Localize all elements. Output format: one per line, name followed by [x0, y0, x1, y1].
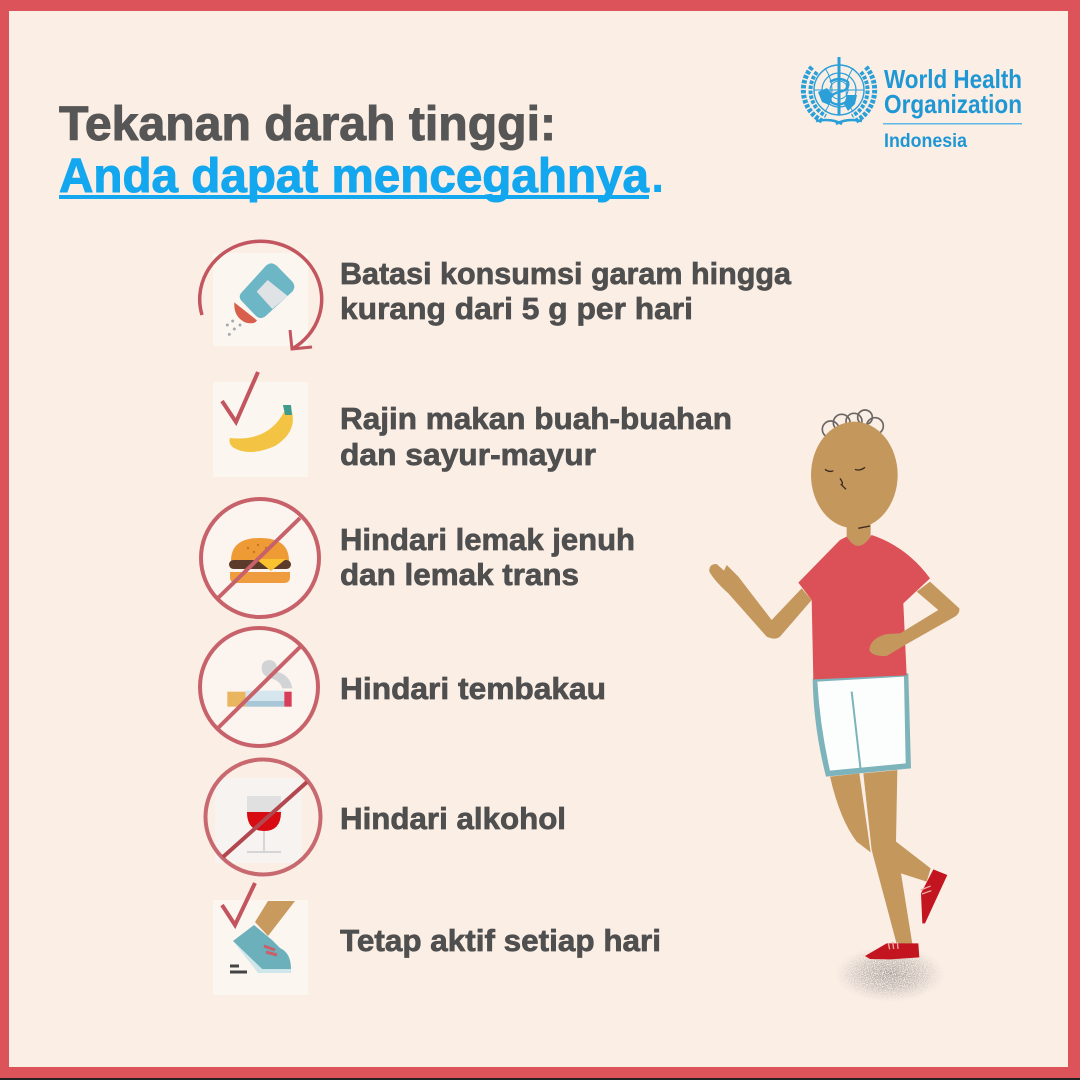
text: limit salt: [340, 256, 792, 326]
ground shadow: [835, 946, 945, 1002]
icon: no tobacco: [200, 628, 318, 746]
text: avoid tobacco: Hindari tembakau: [340, 671, 606, 706]
icon: salt limit: [200, 241, 322, 349]
text: avoid alcohol: Hindari alkohol: [340, 801, 566, 836]
icon: no alcohol: [206, 760, 320, 874]
icon: running shoe with check: [213, 883, 308, 995]
text: fruit and vegetables: [340, 401, 732, 472]
WHO Indonesia logo: [803, 57, 1022, 152]
illustration: standing man: [709, 410, 959, 1002]
text: limit salt: Batasi konsumsi garam hingga: [340, 256, 792, 291]
text: avoid fats: [340, 522, 635, 592]
text: stay active: Tetap aktif setiap hari: [340, 923, 661, 958]
title: Tekanan darah tinggi:: [59, 98, 556, 151]
text: limit salt: kurang dari 5 g per hari: [340, 291, 693, 326]
head, arms and shirt: [709, 410, 959, 679]
title: .: [651, 150, 664, 203]
icon: banana with check: [213, 372, 308, 477]
icon: no burger: [201, 499, 319, 617]
logo wordmark: [883, 64, 1022, 152]
text: avoid fats: dan lemak trans: [340, 557, 579, 592]
logo wordmark: Organization: [884, 89, 1022, 119]
title: Anda dapat mencegahnya: [59, 150, 649, 203]
logo wordmark: World Health: [884, 64, 1022, 94]
legs, shorts and shoes: [813, 673, 947, 959]
logo wordmark: Indonesia: [884, 131, 967, 152]
text: fruit and vegetables: dan sayur-mayur: [340, 437, 596, 472]
text: fruit and vegetables: Rajin makan buah-buahan: [340, 401, 732, 436]
icon: WHO emblem: [803, 57, 875, 124]
title: [59, 98, 664, 203]
text: avoid fats: Hindari lemak jenuh: [340, 522, 635, 557]
